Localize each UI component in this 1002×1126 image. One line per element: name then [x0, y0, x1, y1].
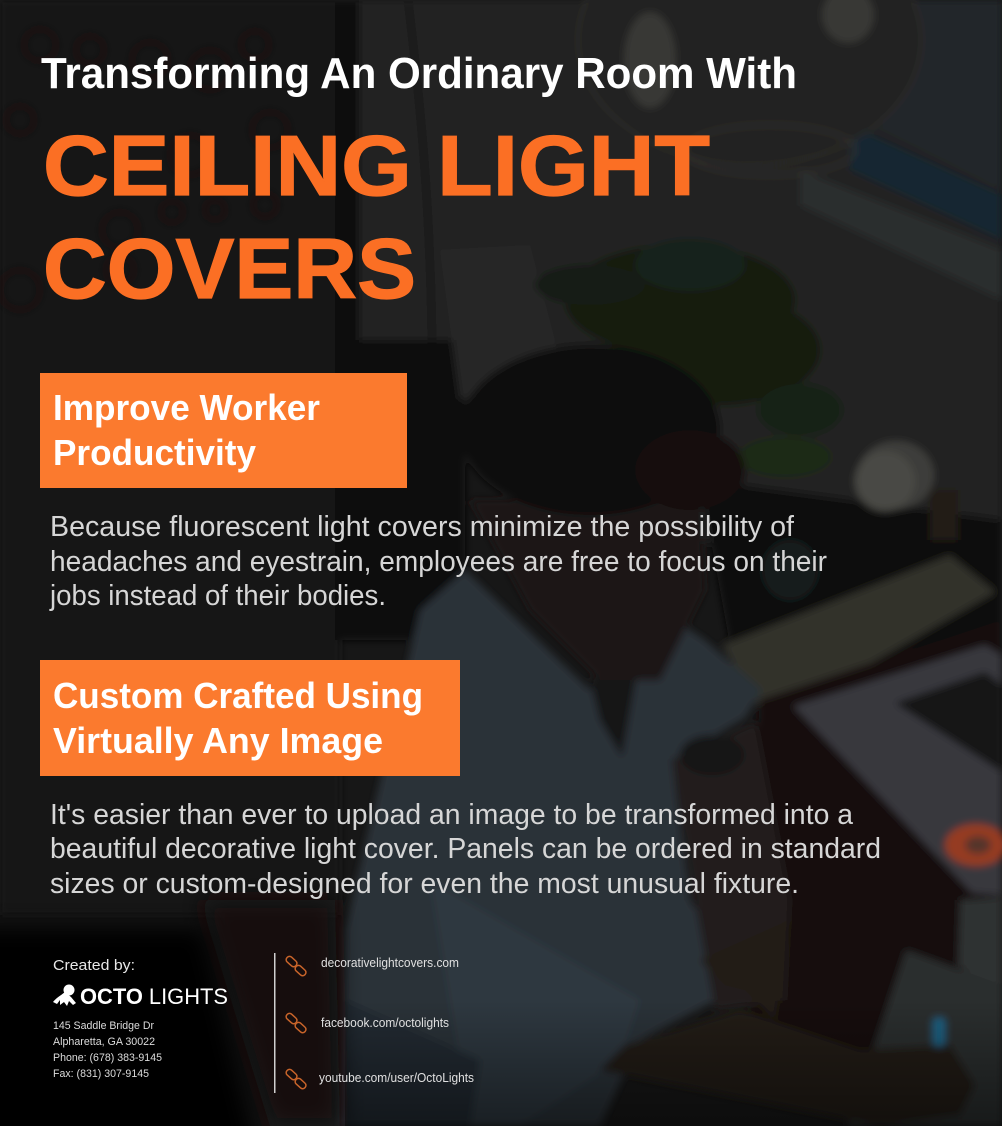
address: Alpharetta, GA 30022 — [53, 1036, 155, 1048]
dark footer fade — [0, 925, 265, 1126]
face — [470, 500, 705, 680]
body text: It's easier than ever to upload an image to be transformed into a — [50, 799, 854, 831]
clock — [858, 441, 934, 509]
address: Fax: (831) 307-9145 — [53, 1068, 149, 1080]
footer: links — [285, 955, 474, 1090]
laptop — [793, 645, 1002, 895]
hair — [460, 345, 720, 515]
title — [43, 119, 710, 317]
address: 145 Saddle Bridge Dr — [53, 1020, 154, 1032]
panel: improve worker productivity — [40, 373, 827, 612]
heading box: Virtually Any Image — [53, 720, 383, 761]
heading box: Custom Crafted Using — [53, 675, 423, 716]
body text: beautiful decorative light cover. Panels can be ordered in standard — [50, 833, 881, 865]
plant leaves — [535, 239, 842, 477]
icon: octopus logo — [53, 984, 76, 1006]
address: Phone: (678) 383-9145 — [53, 1052, 162, 1064]
youtube link: youtube.com/user/OctoLights — [319, 1070, 474, 1085]
heading box: Productivity — [53, 432, 256, 473]
shirt — [340, 570, 762, 1126]
body text: Because fluorescent light covers minimize the possibility of — [50, 511, 795, 543]
icon: link — [285, 955, 307, 977]
subtitle: Transforming An Ordinary Room With — [41, 49, 797, 98]
body text — [50, 799, 881, 900]
body text: sizes or custom-designed for even the most unusual fixture. — [50, 868, 799, 900]
desk — [740, 620, 1002, 1126]
logo wordmark: OCTO LIGHTS — [80, 984, 228, 1009]
facebook link: facebook.com/octolights — [321, 1015, 449, 1030]
poster sketches — [0, 29, 288, 310]
panel: custom crafted using virtually any image — [40, 660, 881, 900]
title: COVERS — [43, 222, 416, 317]
chair edge — [200, 900, 340, 1126]
body text: jobs instead of their bodies. — [49, 580, 386, 612]
heading box: Improve Worker — [53, 387, 320, 428]
created by: Created by: — [53, 957, 135, 974]
website link: decorativelightcovers.com — [321, 955, 459, 970]
heading box — [40, 660, 460, 776]
icon: link — [285, 1068, 307, 1090]
heading box — [40, 373, 407, 488]
arm — [672, 722, 790, 1010]
icon: link — [285, 1012, 307, 1034]
address — [53, 1020, 162, 1080]
body text: headaches and eyestrain, employees are free to focus on their — [50, 546, 827, 578]
title: CEILING LIGHT — [43, 119, 710, 214]
footer: company details — [53, 957, 228, 1080]
body text — [49, 511, 827, 612]
